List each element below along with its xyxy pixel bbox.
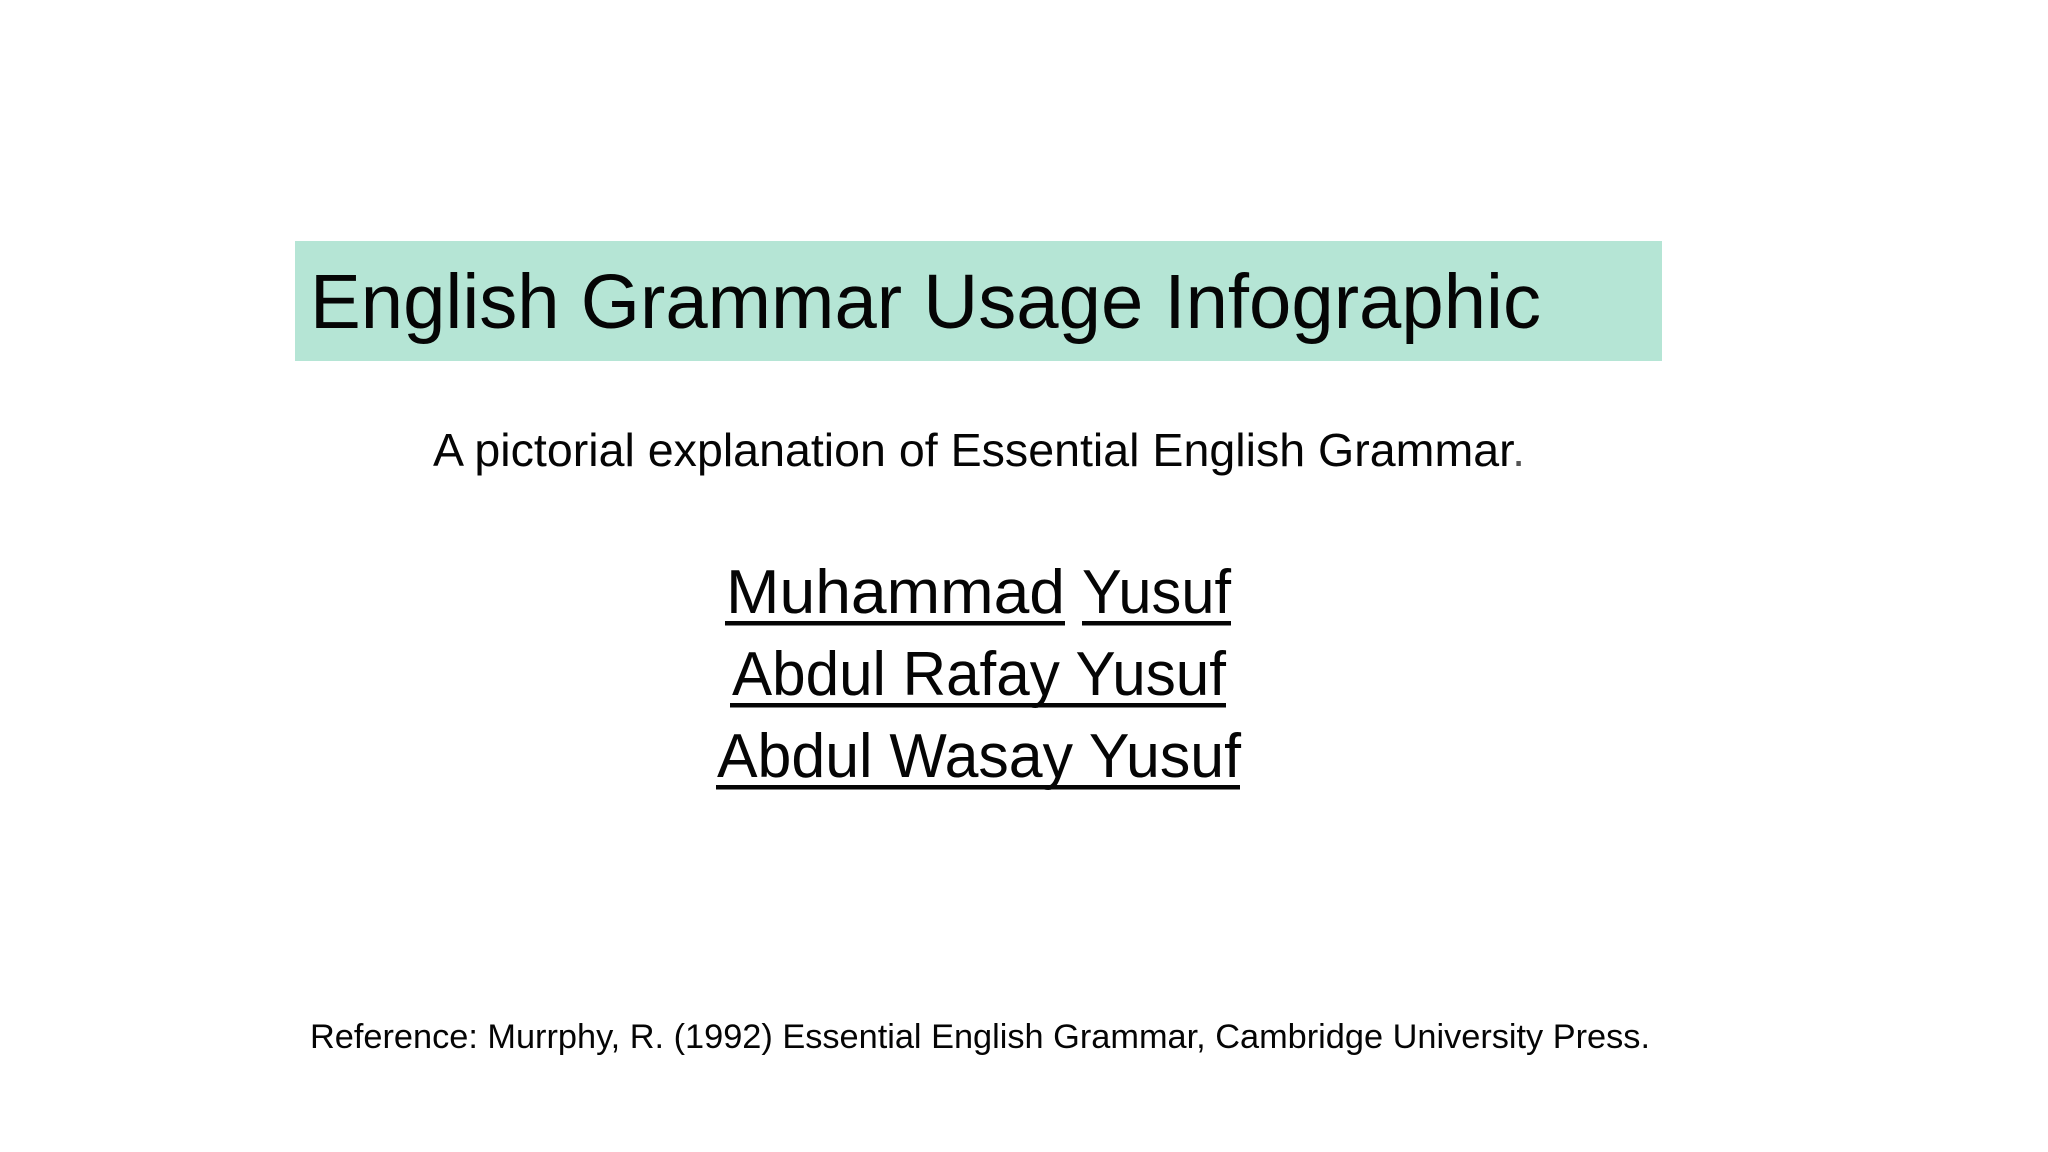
authors xyxy=(716,558,1242,791)
subtitle: A pictorial explanation of Essential English Grammar. xyxy=(433,424,1525,476)
title: English Grammar Usage Infographic xyxy=(310,259,1541,345)
author: Abdul Wasay Yusuf: Abdul Wasay Yusuf xyxy=(717,722,1242,791)
author: Abdul Rafay Yusuf: Abdul Rafay Yusuf xyxy=(732,640,1227,709)
author: Muhammad Yusuf: Muhammad xyxy=(726,558,1065,627)
reference: Reference: Murrphy, R. (1992) Essential English Grammar, Cambridge University Press. xyxy=(310,1018,1650,1056)
author: Muhammad Yusuf xyxy=(725,558,1232,627)
title banner xyxy=(295,241,1662,361)
author: Muhammad Yusuf: Yusuf xyxy=(1082,558,1232,627)
